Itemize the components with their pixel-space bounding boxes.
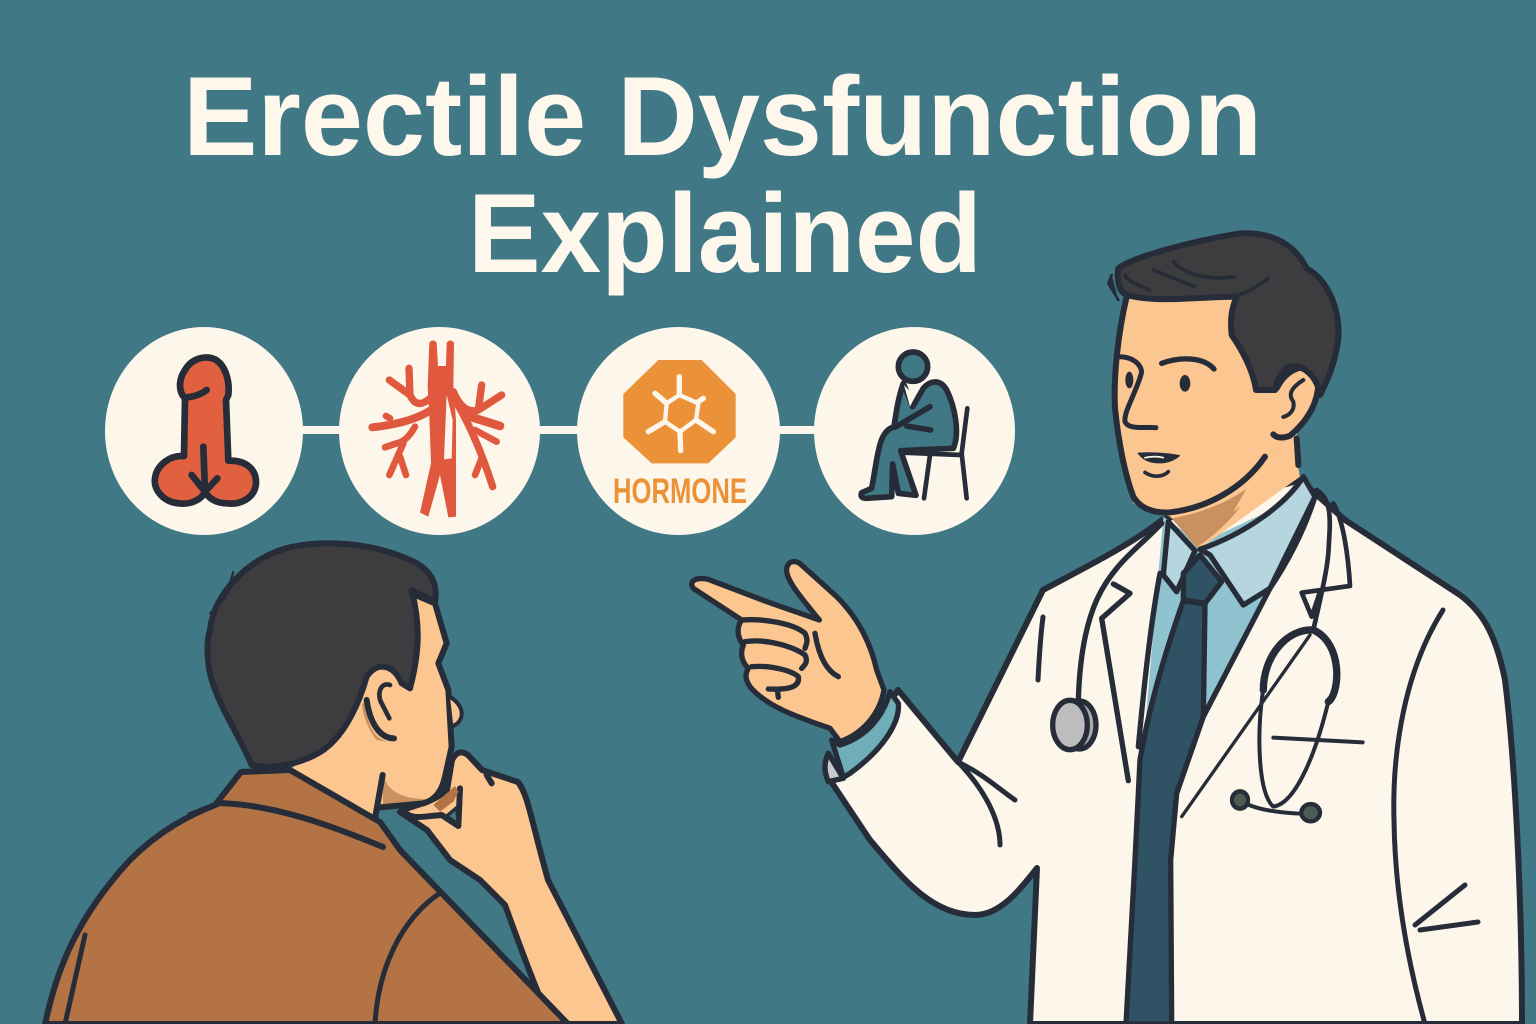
title: Explained xyxy=(468,171,982,296)
icon: seated person xyxy=(814,327,1015,535)
patient hair xyxy=(207,543,436,767)
doctor cuff and hand xyxy=(692,562,898,782)
doctor head xyxy=(1108,233,1339,512)
patient forearm and hand xyxy=(400,752,622,1024)
icon: arteries xyxy=(339,327,540,535)
patient neck and face xyxy=(207,543,492,826)
icon row xyxy=(105,327,1015,535)
patient figure xyxy=(45,543,622,1024)
doctor white coat xyxy=(832,480,1522,1024)
doctor neck, shirt, tie and stethoscope xyxy=(1053,460,1363,1024)
doctor figure xyxy=(692,233,1522,1024)
icon: penis anatomy xyxy=(105,327,303,535)
icon: hormone molecule: HORMONE xyxy=(613,472,747,511)
title xyxy=(183,54,1262,296)
title: Erectile Dysfunction xyxy=(183,54,1262,179)
icon: hormone molecule xyxy=(577,327,780,535)
patient brown jacket xyxy=(45,770,568,1024)
